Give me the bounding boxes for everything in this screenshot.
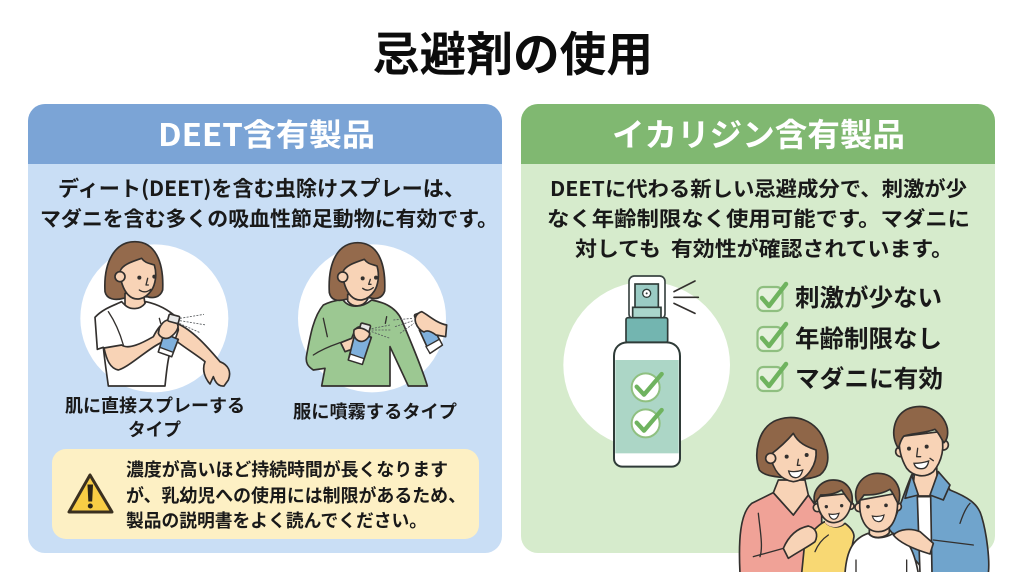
warning text: 製品の説明書をよく読んでください。 bbox=[126, 507, 427, 533]
caption: direct skin spray: タイプ bbox=[128, 416, 181, 442]
caption: direct skin spray: 肌に直接スプレーする bbox=[65, 392, 245, 418]
intro text bbox=[40, 173, 498, 232]
intro text: なく年齢制限なく使用可能です。マダニに bbox=[547, 202, 970, 232]
caption: clothing spray: 服に噴霧するタイプ bbox=[293, 398, 457, 424]
warning text: が、乳幼児への使用には制限があるため、 bbox=[126, 482, 466, 508]
warning text bbox=[126, 456, 466, 533]
father bbox=[888, 406, 989, 572]
boy bbox=[845, 473, 933, 572]
checklist bbox=[758, 278, 943, 394]
warning text: 濃度が高いほど持続時間が長くなります bbox=[126, 456, 448, 482]
panel: icaridin products bbox=[521, 104, 995, 572]
check item: effective on ticks: マダニに有効 bbox=[795, 359, 943, 394]
panel background bbox=[28, 104, 502, 553]
panel background bbox=[521, 104, 995, 553]
illustration: spraying on skin bbox=[80, 242, 230, 392]
panel header: イカリジン含有製品 bbox=[612, 110, 905, 156]
illustration: family bbox=[739, 406, 989, 572]
illustration: spray bottle bbox=[563, 276, 730, 467]
icon: warning triangle bbox=[69, 475, 112, 512]
check item: no age limit: 年齢制限なし bbox=[795, 319, 942, 354]
panel header bbox=[28, 104, 502, 164]
illustration: spraying on clothes bbox=[298, 243, 447, 392]
panel: DEET products bbox=[28, 104, 502, 553]
intro text: DEETに代わる新しい忌避成分で、刺激が少 bbox=[550, 172, 968, 202]
intro text bbox=[547, 172, 970, 262]
intro text: マダニを含む多くの吸血性節足動物に有効です。 bbox=[40, 202, 498, 232]
baby bbox=[783, 480, 854, 572]
check item: low irritation: 刺激が少ない bbox=[795, 278, 942, 313]
title: 忌避剤の使用 bbox=[373, 16, 653, 85]
intro text: ディート(DEET)を含む虫除けスプレーは、 bbox=[58, 173, 465, 203]
intro text: 対しても 有効性が確認されています。 bbox=[575, 232, 953, 262]
caption: direct skin spray bbox=[65, 392, 245, 442]
panel header bbox=[521, 104, 995, 164]
panel header: DEET含有製品 bbox=[158, 110, 375, 155]
warning callout bbox=[52, 449, 479, 539]
mother bbox=[739, 418, 828, 572]
